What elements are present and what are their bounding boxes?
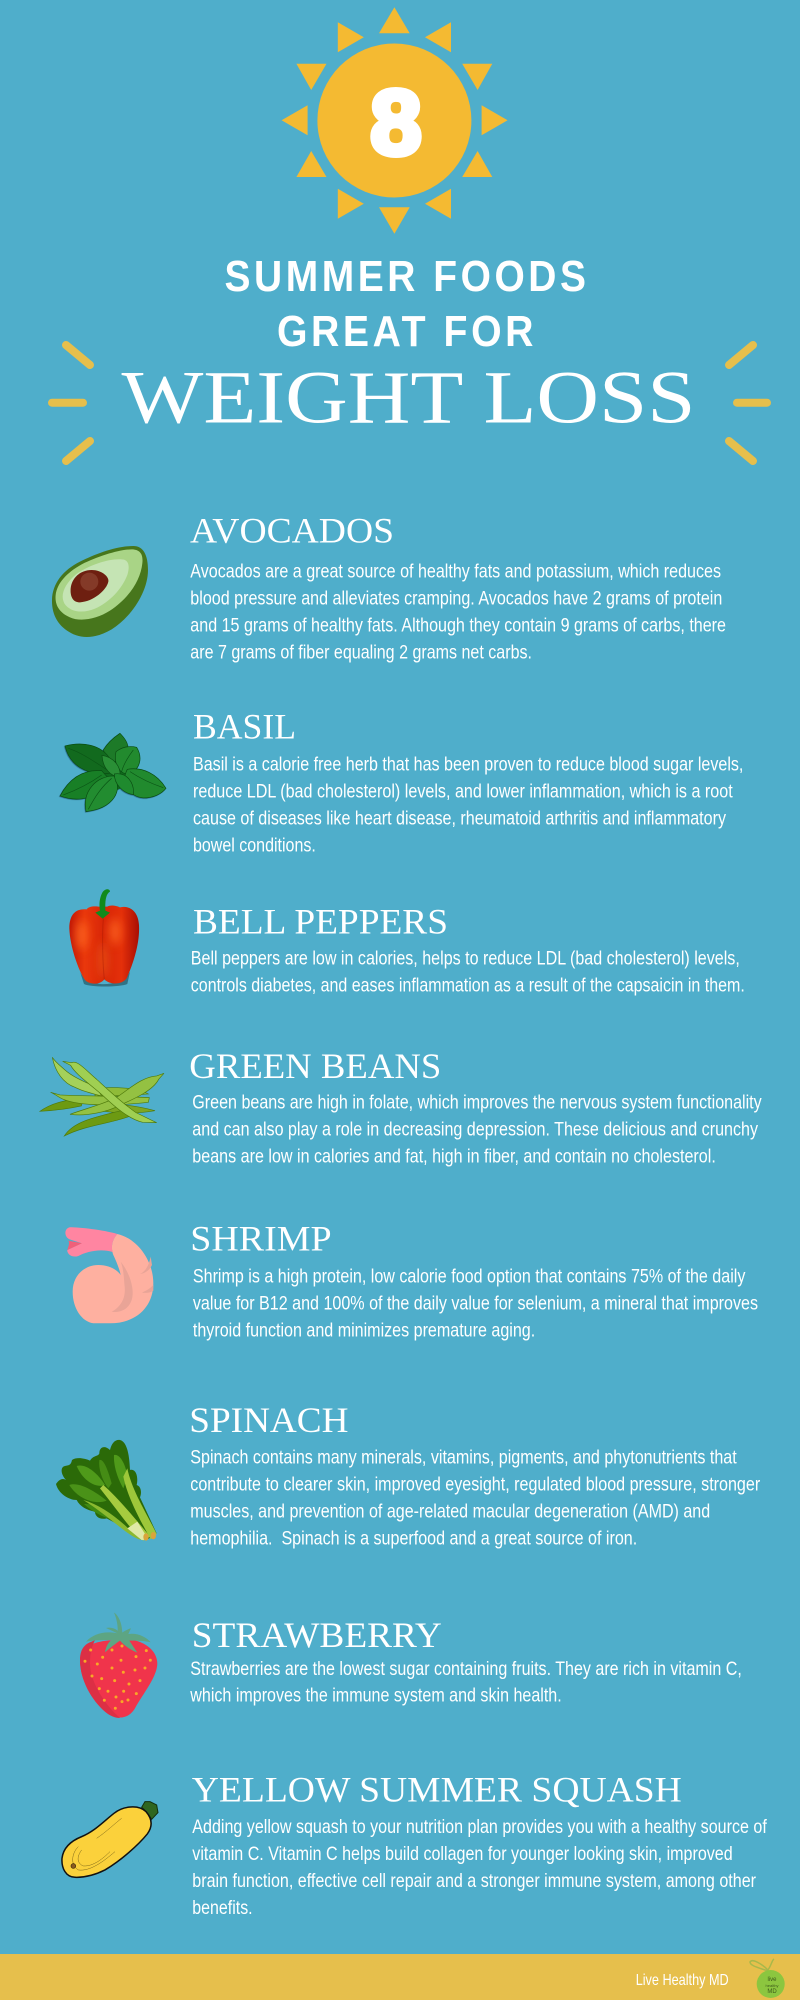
text: bell peppers description (191, 948, 745, 997)
title: weight loss: WEIGHT LOSS (122, 357, 696, 440)
panel: avocados (52, 511, 726, 664)
text: strawberry description: which improves the immune system and skin health. (189, 1685, 562, 1707)
panel: header (52, 7, 767, 461)
heading: spinach: SPINACH (189, 1400, 348, 1440)
text: avocados description: are 7 grams of fiber equaling 2 grams net carbs. (190, 642, 532, 664)
icon: yellow squash (62, 1802, 158, 1877)
icon: avocado (52, 546, 148, 637)
icon: red bell pepper (69, 889, 139, 986)
text: avocados description (190, 561, 726, 664)
panel: green beans (40, 1046, 762, 1168)
heading: green beans: GREEN BEANS (189, 1046, 441, 1086)
text: shrimp description: thyroid function and minimizes premature aging. (193, 1320, 535, 1342)
icon: live healthy logo apple (750, 1959, 785, 1998)
text: basil description (193, 754, 743, 857)
decorative rays: right (729, 345, 767, 461)
icon: sun with number 8: 8 (370, 72, 422, 174)
icon: live healthy logo apple: healthy (766, 1983, 778, 1988)
icon: basil leaves (60, 733, 166, 812)
text: strawberry description (189, 1658, 742, 1707)
panel: spinach (56, 1400, 761, 1550)
text: spinach description: hemophilia. Spinach is a superfood and a great source of iron. (190, 1528, 637, 1550)
title: great for: GREAT FOR (277, 307, 537, 356)
panel: basil (60, 707, 743, 857)
text: shrimp description (193, 1266, 758, 1342)
icon: sun with number 8 (282, 7, 508, 234)
icon: spinach bunch (56, 1440, 157, 1541)
panel: shrimp (65, 1219, 758, 1342)
heading: bell peppers: BELL PEPPERS (193, 901, 448, 941)
panel: bell peppers (69, 889, 745, 997)
panel: yellow summer squash (62, 1770, 767, 1919)
heading: strawberry: STRAWBERRY (192, 1615, 442, 1655)
icon: live healthy logo apple: live (767, 1977, 777, 1983)
icon: strawberry (80, 1613, 157, 1718)
footer text: Live Healthy MD (636, 1972, 729, 1989)
heading: avocados: AVOCADOS (190, 511, 394, 551)
heading: shrimp: SHRIMP (190, 1219, 332, 1259)
title: summer foods: SUMMER FOODS (224, 252, 590, 301)
icon: green beans (40, 1057, 164, 1136)
panel: strawberry (80, 1613, 742, 1718)
heading: yellow summer squash: YELLOW SUMMER SQUASH (192, 1770, 682, 1810)
text: squash description (192, 1816, 767, 1919)
decorative rays: left (52, 345, 90, 461)
text: squash description: benefits. (192, 1897, 253, 1919)
icon: shrimp (65, 1227, 153, 1323)
footer band (0, 1954, 800, 2000)
icon: live healthy logo apple: MD (767, 1989, 777, 1995)
text: spinach description (190, 1447, 761, 1550)
text: basil description: bowel conditions. (193, 835, 316, 857)
heading: basil: BASIL (193, 707, 296, 747)
text: green beans description (192, 1092, 762, 1168)
